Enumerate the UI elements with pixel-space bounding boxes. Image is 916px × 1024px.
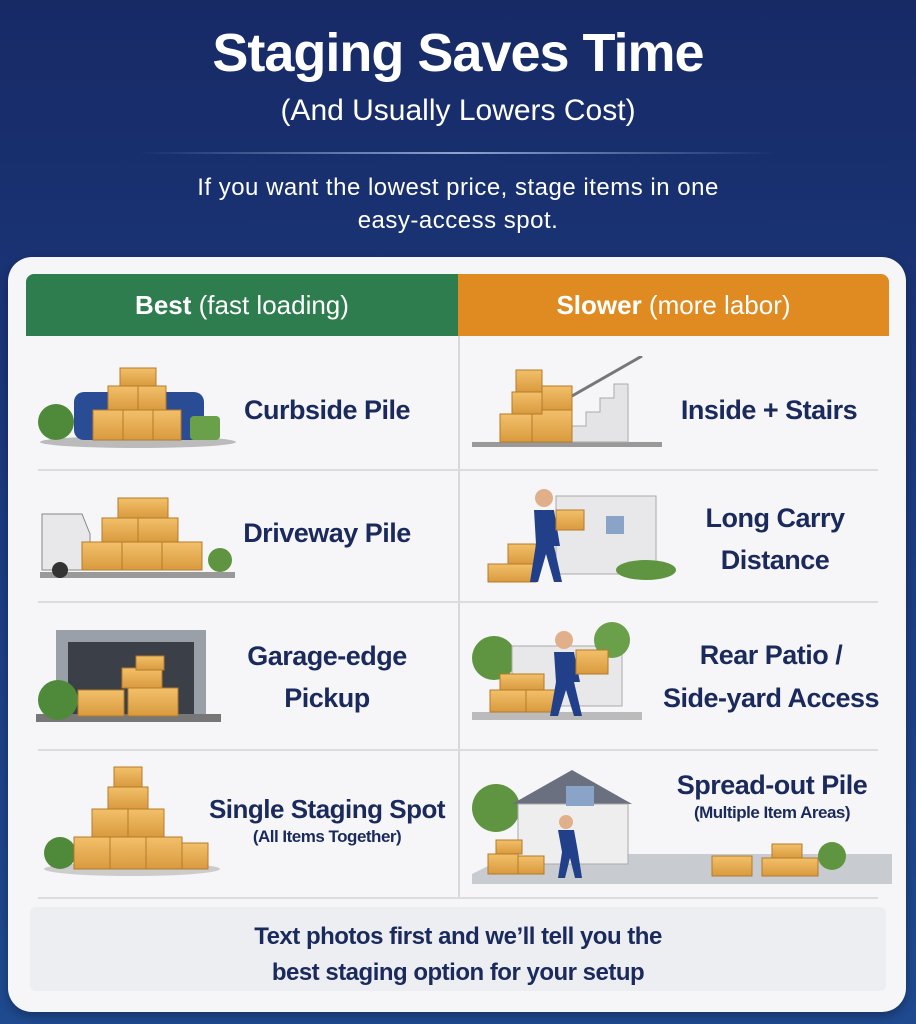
icon: driveway pile	[40, 498, 235, 578]
label: garage edge	[247, 641, 407, 713]
header: slower: Slower (more labor)	[556, 290, 791, 320]
icon: long carry	[488, 489, 676, 582]
label: spread-out pile	[677, 770, 867, 822]
icon: single staging spot	[44, 766, 220, 876]
label: rear patio: Side-yard Access	[663, 683, 879, 713]
label: single staging spot: Single Staging Spot	[209, 794, 445, 824]
footer text: Text photos first and we’ll tell you the	[254, 923, 662, 950]
label: single staging spot	[209, 794, 446, 846]
intro text: If you want the lowest price, stage items in one	[197, 174, 719, 201]
label: spread-out pile: Spread-out Pile	[677, 770, 867, 800]
main card	[8, 257, 906, 1012]
footer box	[30, 907, 886, 991]
icon: curbside pile	[38, 368, 236, 448]
label: spread-out pile: (Multiple Item Areas)	[694, 803, 850, 822]
label: driveway pile: Driveway Pile	[243, 518, 411, 548]
icon: garage edge	[36, 630, 221, 722]
label: garage edge: Garage-edge	[247, 641, 407, 671]
header: best	[26, 274, 458, 336]
label: long carry	[705, 503, 845, 575]
label: rear patio	[663, 640, 879, 713]
icon: inside stairs	[472, 356, 662, 447]
header: slower	[458, 274, 889, 336]
footer text: best staging option for your setup	[272, 959, 644, 986]
footer text	[254, 923, 662, 986]
label: curbside pile: Curbside Pile	[244, 395, 410, 425]
label: long carry: Long Carry	[705, 503, 845, 533]
intro text	[197, 174, 719, 234]
icon: rear patio	[472, 622, 642, 720]
label: garage edge: Pickup	[284, 683, 370, 713]
icon: spread-out pile	[472, 770, 892, 884]
subtitle: (And Usually Lowers Cost)	[280, 94, 636, 127]
label: rear patio: Rear Patio /	[700, 640, 842, 670]
label: inside stairs: Inside + Stairs	[681, 395, 857, 425]
label: long carry: Distance	[721, 545, 829, 575]
intro text: easy-access spot.	[358, 207, 558, 234]
header: best: Best (fast loading)	[135, 290, 349, 320]
title: Staging Saves Time	[212, 23, 704, 83]
label: single staging spot: (All Items Together)	[253, 827, 401, 846]
